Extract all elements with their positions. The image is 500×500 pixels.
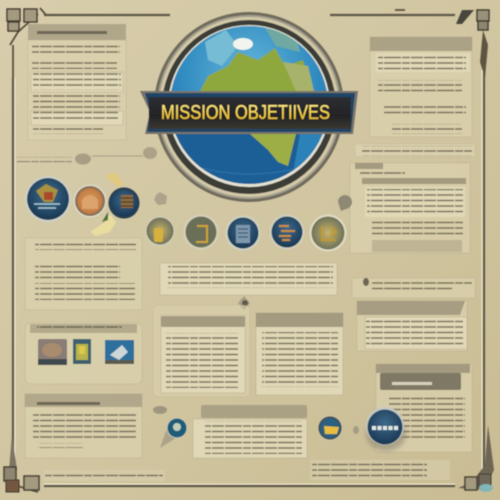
- note: right: [352, 278, 475, 298]
- icon: beacon: [25, 176, 71, 222]
- globe ring: [154, 12, 344, 202]
- panel: right middle: [350, 163, 470, 253]
- heading: [161, 316, 245, 327]
- icon: orange badge: [74, 184, 106, 218]
- banner: [140, 91, 358, 134]
- marker: center connector: [238, 296, 250, 310]
- icon row: left cluster: [25, 172, 140, 236]
- icon: teal circle: [160, 418, 188, 448]
- connector marker: [154, 192, 167, 205]
- heading: [355, 163, 383, 169]
- decorative paper scraps: [90, 172, 124, 236]
- panel: center right: [256, 313, 343, 395]
- image: booklet: [73, 339, 91, 364]
- heading: [256, 313, 343, 327]
- tab heading: [30, 324, 137, 333]
- heading: [25, 394, 142, 407]
- panel: bottom center: [193, 405, 307, 458]
- icon: gold emblem: [310, 214, 346, 252]
- heading: [357, 301, 465, 315]
- icon: gold tag: [145, 216, 175, 246]
- panel: top right: [370, 37, 472, 137]
- heading: [370, 37, 472, 51]
- heading: [201, 405, 307, 418]
- footer text: left: [43, 470, 165, 481]
- panel: images: [25, 323, 142, 384]
- marker: connector to bottom circle: [153, 406, 167, 414]
- marker: right of globe: [338, 195, 352, 211]
- icon: chart: [270, 214, 304, 250]
- icon: stack badge: [108, 188, 140, 218]
- panel: top left objectives: [28, 24, 126, 140]
- icon: large button: [366, 407, 406, 451]
- title: MISSION OBJETIIVES: [161, 102, 330, 124]
- panel: bottom right: [376, 364, 472, 452]
- note: top right: [355, 144, 475, 157]
- heading: [376, 364, 470, 373]
- image: compass: [38, 339, 67, 365]
- footer text: center right: [310, 460, 450, 480]
- panel: center text: [160, 263, 337, 295]
- panel: left lower text: [25, 238, 142, 310]
- icon: yellow folder circle: [318, 416, 342, 440]
- marker: small drop: [353, 426, 359, 434]
- label with connector: [17, 147, 157, 164]
- panel: right lower: [357, 301, 467, 351]
- panel: center left: [153, 305, 250, 397]
- globe: [154, 12, 344, 202]
- icon: document: [184, 214, 218, 250]
- icon row: center: [145, 192, 346, 252]
- panel: bottom left: [25, 394, 142, 458]
- heading: [28, 24, 126, 40]
- icon: list: [226, 216, 260, 250]
- image: landscape: [105, 340, 134, 364]
